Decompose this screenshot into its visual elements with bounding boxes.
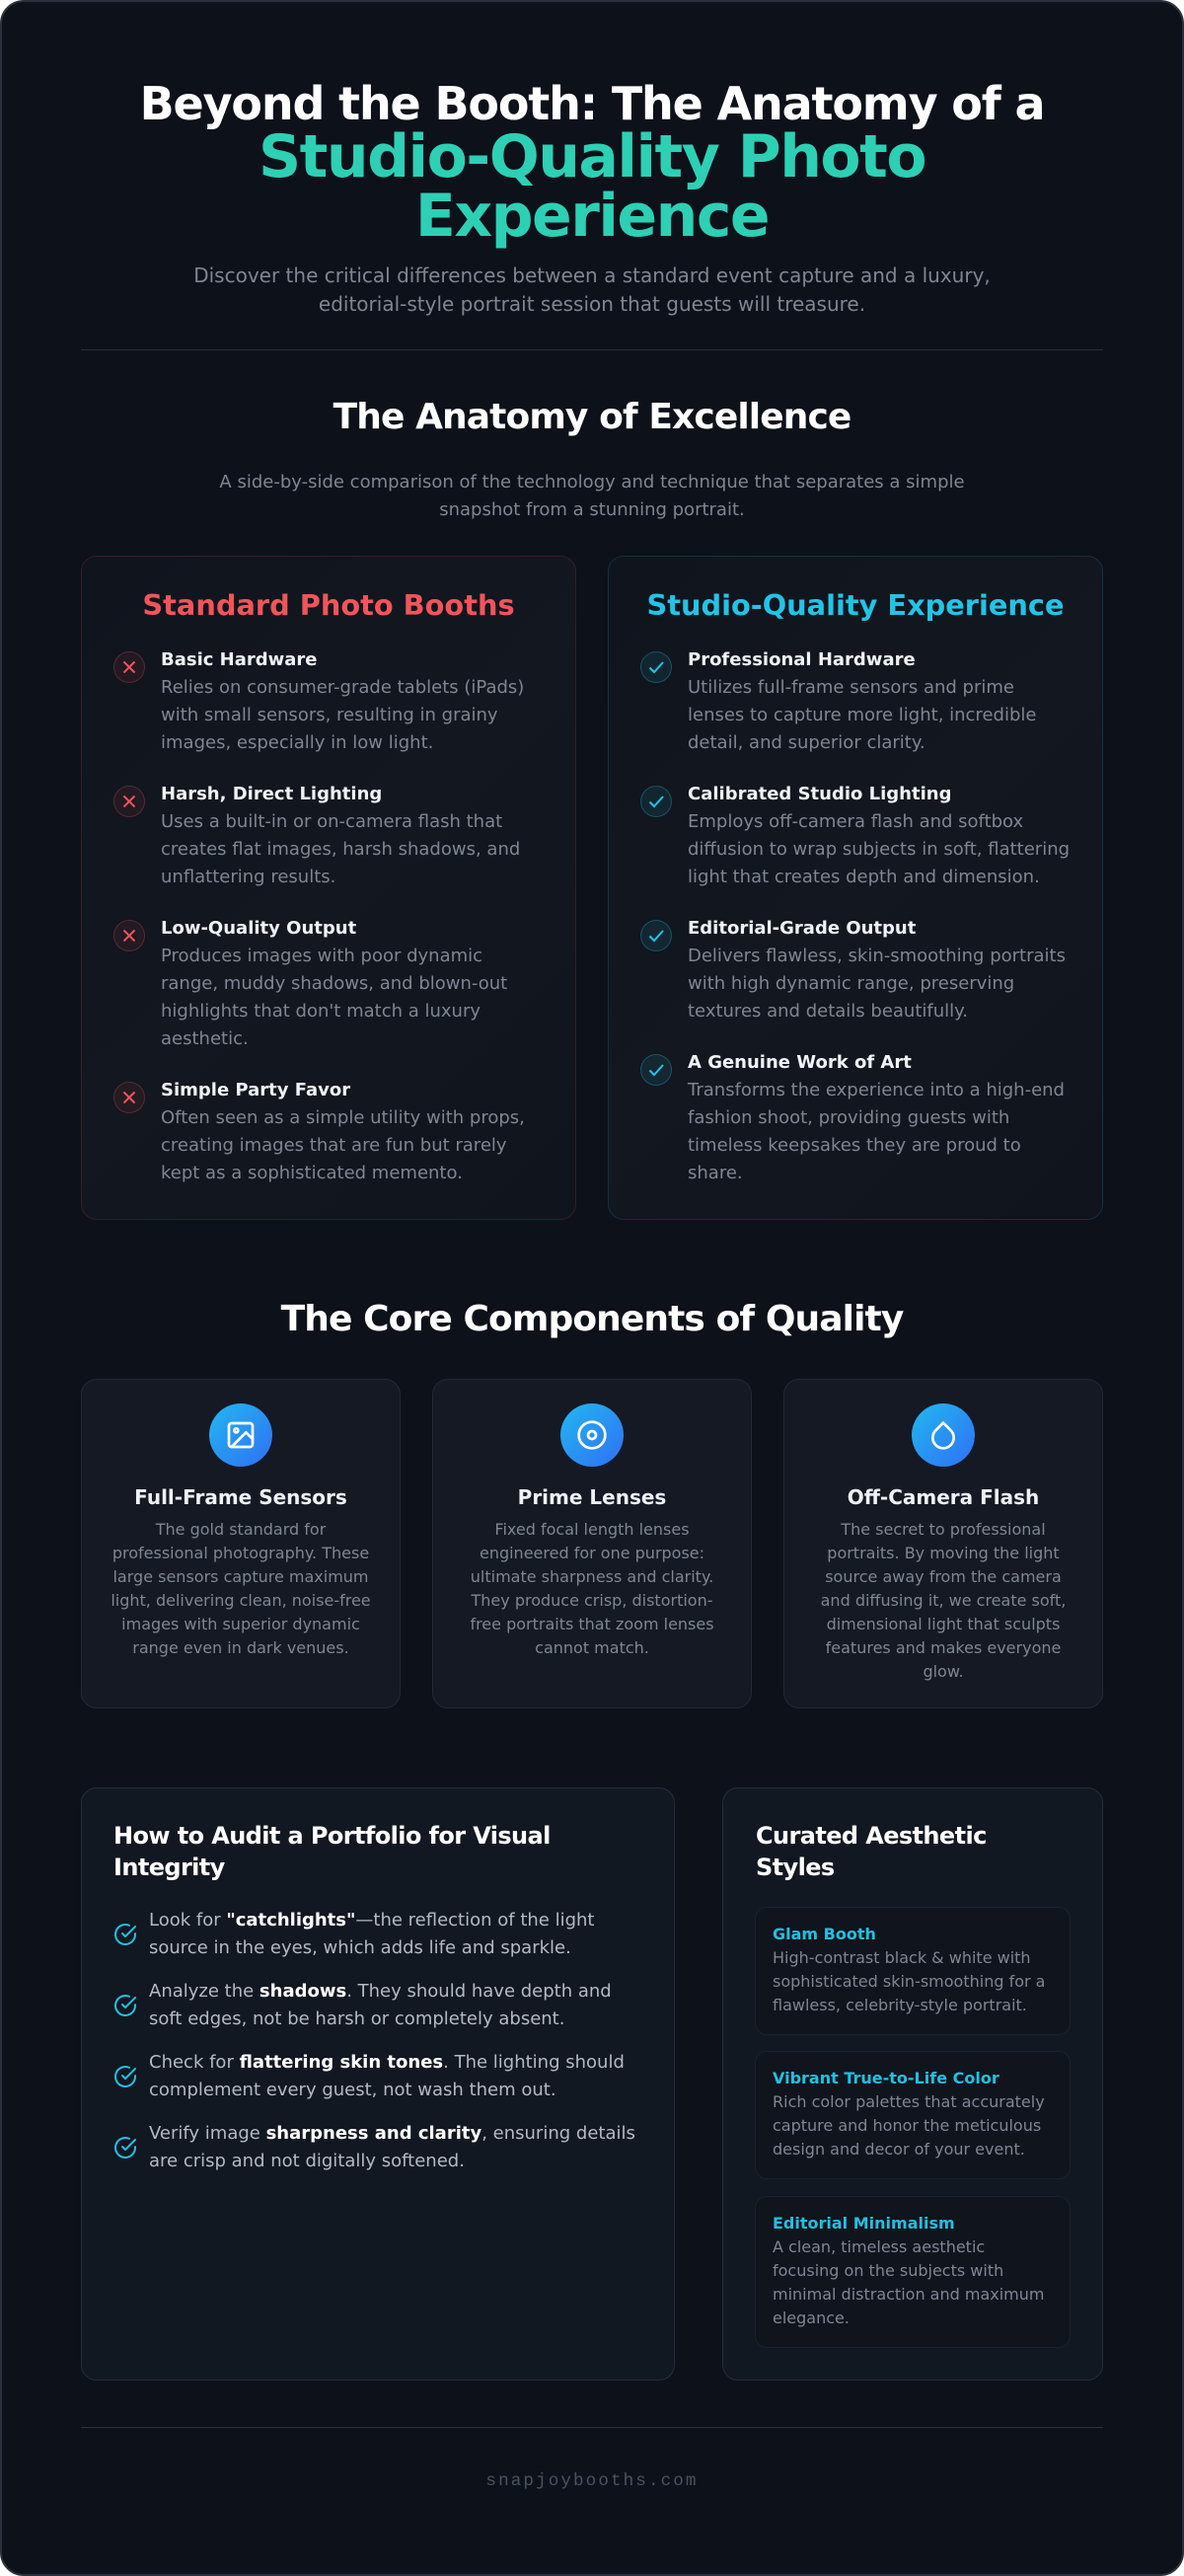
panel: portfolio audit: [81, 1787, 675, 2381]
panel heading: [113, 1822, 551, 1881]
panel: standard photo booths: Uses a built-in or on-camera flash that: [161, 811, 502, 832]
card description: dimensional light that sculpts: [827, 1615, 1060, 1633]
style: editorial minimalism: [755, 2196, 1071, 2348]
icon: droplet: [912, 1403, 975, 1467]
panel: standard photo booths: creates flat images, harsh shadows, and: [161, 839, 520, 860]
icon: image: [209, 1403, 272, 1467]
panel: standard photo booths: Produces images with poor dynamic: [161, 946, 482, 966]
panel: studio-quality experience: timeless keepsakes they are proud to: [688, 1135, 1021, 1156]
check item: catchlights: Look for "catchlights"—the reflection of the light: [149, 1910, 594, 1931]
card description: ultimate sharpness and clarity.: [471, 1567, 713, 1586]
style: vibrant color: design and decor of your event.: [773, 2140, 1025, 2159]
item: simple party favor: Simple Party Favor: [161, 1080, 350, 1100]
style: glam booth: Glam Booth: [773, 1925, 876, 1943]
style: glam booth: High-contrast black & white with: [773, 1948, 1031, 1967]
panel: studio-quality experience: fashion shoot, providing guests with: [688, 1107, 1009, 1128]
item: low-quality output: Low-Quality Output: [161, 918, 356, 939]
panel: standard photo booths: aesthetic.: [161, 1028, 249, 1049]
section lead text: [219, 472, 965, 520]
subtitle: Discover the critical differences between a standard event capture and a luxury,: [193, 264, 991, 287]
style: vibrant color: Vibrant True-to-Life Color: [773, 2069, 999, 2087]
card: off-camera flash: [783, 1379, 1103, 1708]
main title: Studio-Quality Photo: [259, 122, 925, 191]
icon: check circle: [114, 1995, 136, 2016]
style: vibrant color: [755, 2051, 1071, 2179]
panel heading: Styles: [756, 1854, 835, 1881]
card description: [821, 1520, 1066, 1681]
subtitle: editorial-style portrait session that guests will treasure.: [319, 292, 865, 316]
card description: large sensors capture maximum: [112, 1567, 369, 1586]
icon: check circle: [114, 1924, 136, 1945]
panel: studio-quality experience: lenses to capture more light, incredible: [688, 705, 1036, 725]
panel heading: Studio-Quality Experience: [646, 588, 1065, 622]
card description: light, delivering clean, noise-free: [111, 1591, 371, 1610]
panel heading: Integrity: [113, 1854, 225, 1881]
card title: Off-Camera Flash: [848, 1485, 1039, 1509]
panel: studio-quality experience: [608, 556, 1103, 1220]
section heading: anatomy of excellence: The Anatomy of Excellence: [333, 397, 851, 437]
style: glam booth: sophisticated skin-smoothing for a: [773, 1972, 1045, 1991]
panel: standard photo booths: kept as a sophisticated memento.: [161, 1163, 463, 1183]
item: editorial-grade output: Editorial-Grade Output: [688, 918, 916, 939]
item: basic hardware: Basic Hardware: [161, 649, 318, 670]
check item: skin tones: [114, 2052, 625, 2100]
style: vibrant color: capture and honor the meticulous: [773, 2116, 1041, 2135]
item: harsh direct lighting: Harsh, Direct Lighting: [161, 784, 382, 804]
item: simple party favor: [113, 1080, 525, 1183]
card description: engineered for one purpose:: [480, 1544, 704, 1562]
card description: [470, 1520, 714, 1657]
check item: sharpness: are crisp and not digitally softened.: [149, 2151, 465, 2171]
panel heading: Standard Photo Booths: [142, 588, 515, 622]
panel: standard photo booths: Often seen as a simple utility with props,: [161, 1107, 525, 1128]
icon: check circle: [114, 2066, 136, 2087]
card description: portraits. By moving the light: [827, 1544, 1060, 1562]
card: prime lenses: [432, 1379, 752, 1708]
card description: range even in dark venues.: [132, 1638, 349, 1657]
style: editorial minimalism: A clean, timeless aesthetic: [773, 2237, 985, 2256]
panel: studio-quality experience: light that creates depth and dimension.: [688, 867, 1040, 887]
panel: studio-quality experience: Employs off-camera flash and softbox: [688, 811, 1023, 832]
panel: studio-quality experience: diffusion to wrap subjects in soft, flattering: [688, 839, 1070, 860]
panel: studio-quality experience: Utilizes full-frame sensors and prime: [688, 677, 1014, 698]
check item: skin tones: complement every guest, not wash them out.: [149, 2080, 556, 2100]
card description: professional photography. These: [112, 1544, 369, 1562]
check item: sharpness: Verify image sharpness and clarity, ensuring details: [149, 2123, 635, 2144]
card description: cannot match.: [535, 1638, 649, 1657]
footer: website: snapjoybooths.com: [485, 2471, 699, 2491]
icon: check circle: [114, 2137, 136, 2159]
panel heading: [756, 1822, 987, 1881]
panel: standard photo booths: with small sensors, resulting in grainy: [161, 705, 498, 725]
panel: studio-quality experience: Transforms the experience into a high-end: [688, 1080, 1065, 1100]
card: full-frame sensors: [81, 1379, 401, 1708]
section lead text: snapshot from a stunning portrait.: [439, 499, 745, 520]
card description: glow.: [923, 1662, 964, 1681]
style: editorial minimalism: elegance.: [773, 2309, 850, 2327]
style: editorial minimalism: minimal distraction and maximum: [773, 2285, 1044, 2304]
panel: standard photo booths: creating images that are fun but rarely: [161, 1135, 507, 1156]
subtitle: [193, 264, 991, 316]
card description: images with superior dynamic: [121, 1615, 360, 1633]
card description: They produce crisp, distortion-: [472, 1591, 712, 1610]
panel heading: Curated Aesthetic: [756, 1822, 987, 1850]
card title: Full-Frame Sensors: [134, 1485, 347, 1509]
main title: Beyond the Booth: The Anatomy of a: [140, 77, 1044, 130]
card title: Prime Lenses: [518, 1485, 666, 1509]
item: harsh direct lighting: [113, 784, 520, 887]
card description: free portraits that zoom lenses: [470, 1615, 714, 1633]
card description: The secret to professional: [841, 1520, 1046, 1539]
card description: and diffusing it, we create soft,: [821, 1591, 1066, 1610]
panel: standard photo booths: Relies on consumer-grade tablets (iPads): [161, 677, 524, 698]
panel: curated aesthetic styles: [722, 1787, 1103, 2381]
check item: sharpness: [114, 2123, 635, 2171]
panel: standard photo booths: images, especially in low light.: [161, 732, 433, 753]
icon: lens: [560, 1403, 624, 1467]
item: editorial-grade output: [640, 918, 1066, 1022]
panel: studio-quality experience: Delivers flawless, skin-smoothing portraits: [688, 946, 1066, 966]
panel: standard photo booths: highlights that don't match a luxury: [161, 1001, 481, 1022]
item: low-quality output: [113, 918, 507, 1049]
card description: [111, 1520, 371, 1657]
style: editorial minimalism: Editorial Minimalism: [773, 2214, 955, 2233]
check item: skin tones: Check for flattering skin tones. The lighting should: [149, 2052, 625, 2073]
panel: studio-quality experience: share.: [688, 1163, 743, 1183]
panel: studio-quality experience: detail, and superior clarity.: [688, 732, 925, 753]
card description: The gold standard for: [156, 1520, 326, 1539]
header: [140, 77, 1044, 316]
main title: [140, 77, 1044, 251]
item: a genuine work of art: [640, 1052, 1065, 1183]
card description: features and makes everyone: [826, 1638, 1061, 1657]
item: a genuine work of art: A Genuine Work of Art: [688, 1052, 912, 1073]
card description: source away from the camera: [825, 1567, 1062, 1586]
panel: studio-quality experience: with high dynamic range, preserving: [688, 973, 1014, 994]
panel: standard photo booths: range, muddy shadows, and blown-out: [161, 973, 507, 994]
style: glam booth: flawless, celebrity-style portrait.: [773, 1996, 1027, 2014]
panel heading: How to Audit a Portfolio for Visual: [113, 1822, 551, 1850]
check item: shadows: [114, 1981, 612, 2029]
style: vibrant color: Rich color palettes that accurately: [773, 2092, 1045, 2111]
item: calibrated studio lighting: Calibrated Studio Lighting: [688, 784, 951, 804]
check item: catchlights: [114, 1910, 594, 1958]
panel: standard photo booths: [81, 556, 576, 1220]
check item: shadows: soft edges, not be harsh or completely absent.: [149, 2008, 564, 2029]
section heading: core components: The Core Components of Quality: [281, 1299, 903, 1339]
item: basic hardware: [113, 649, 524, 753]
item: professional hardware: Professional Hardware: [688, 649, 916, 670]
style: editorial minimalism: focusing on the subjects with: [773, 2261, 1003, 2280]
check item: shadows: Analyze the shadows. They should have depth and: [149, 1981, 612, 2002]
panel: standard photo booths: unflattering results.: [161, 867, 335, 887]
style: glam booth: [755, 1907, 1071, 2035]
panel: studio-quality experience: textures and details beautifully.: [688, 1001, 968, 1022]
card description: Fixed focal length lenses: [494, 1520, 690, 1539]
section lead text: A side-by-side comparison of the technology and technique that separates a simple: [219, 472, 965, 492]
item: professional hardware: [640, 649, 1036, 753]
main title: Experience: [415, 182, 769, 251]
item: calibrated studio lighting: [640, 784, 1070, 887]
check item: catchlights: source in the eyes, which adds life and sparkle.: [149, 1937, 571, 1958]
